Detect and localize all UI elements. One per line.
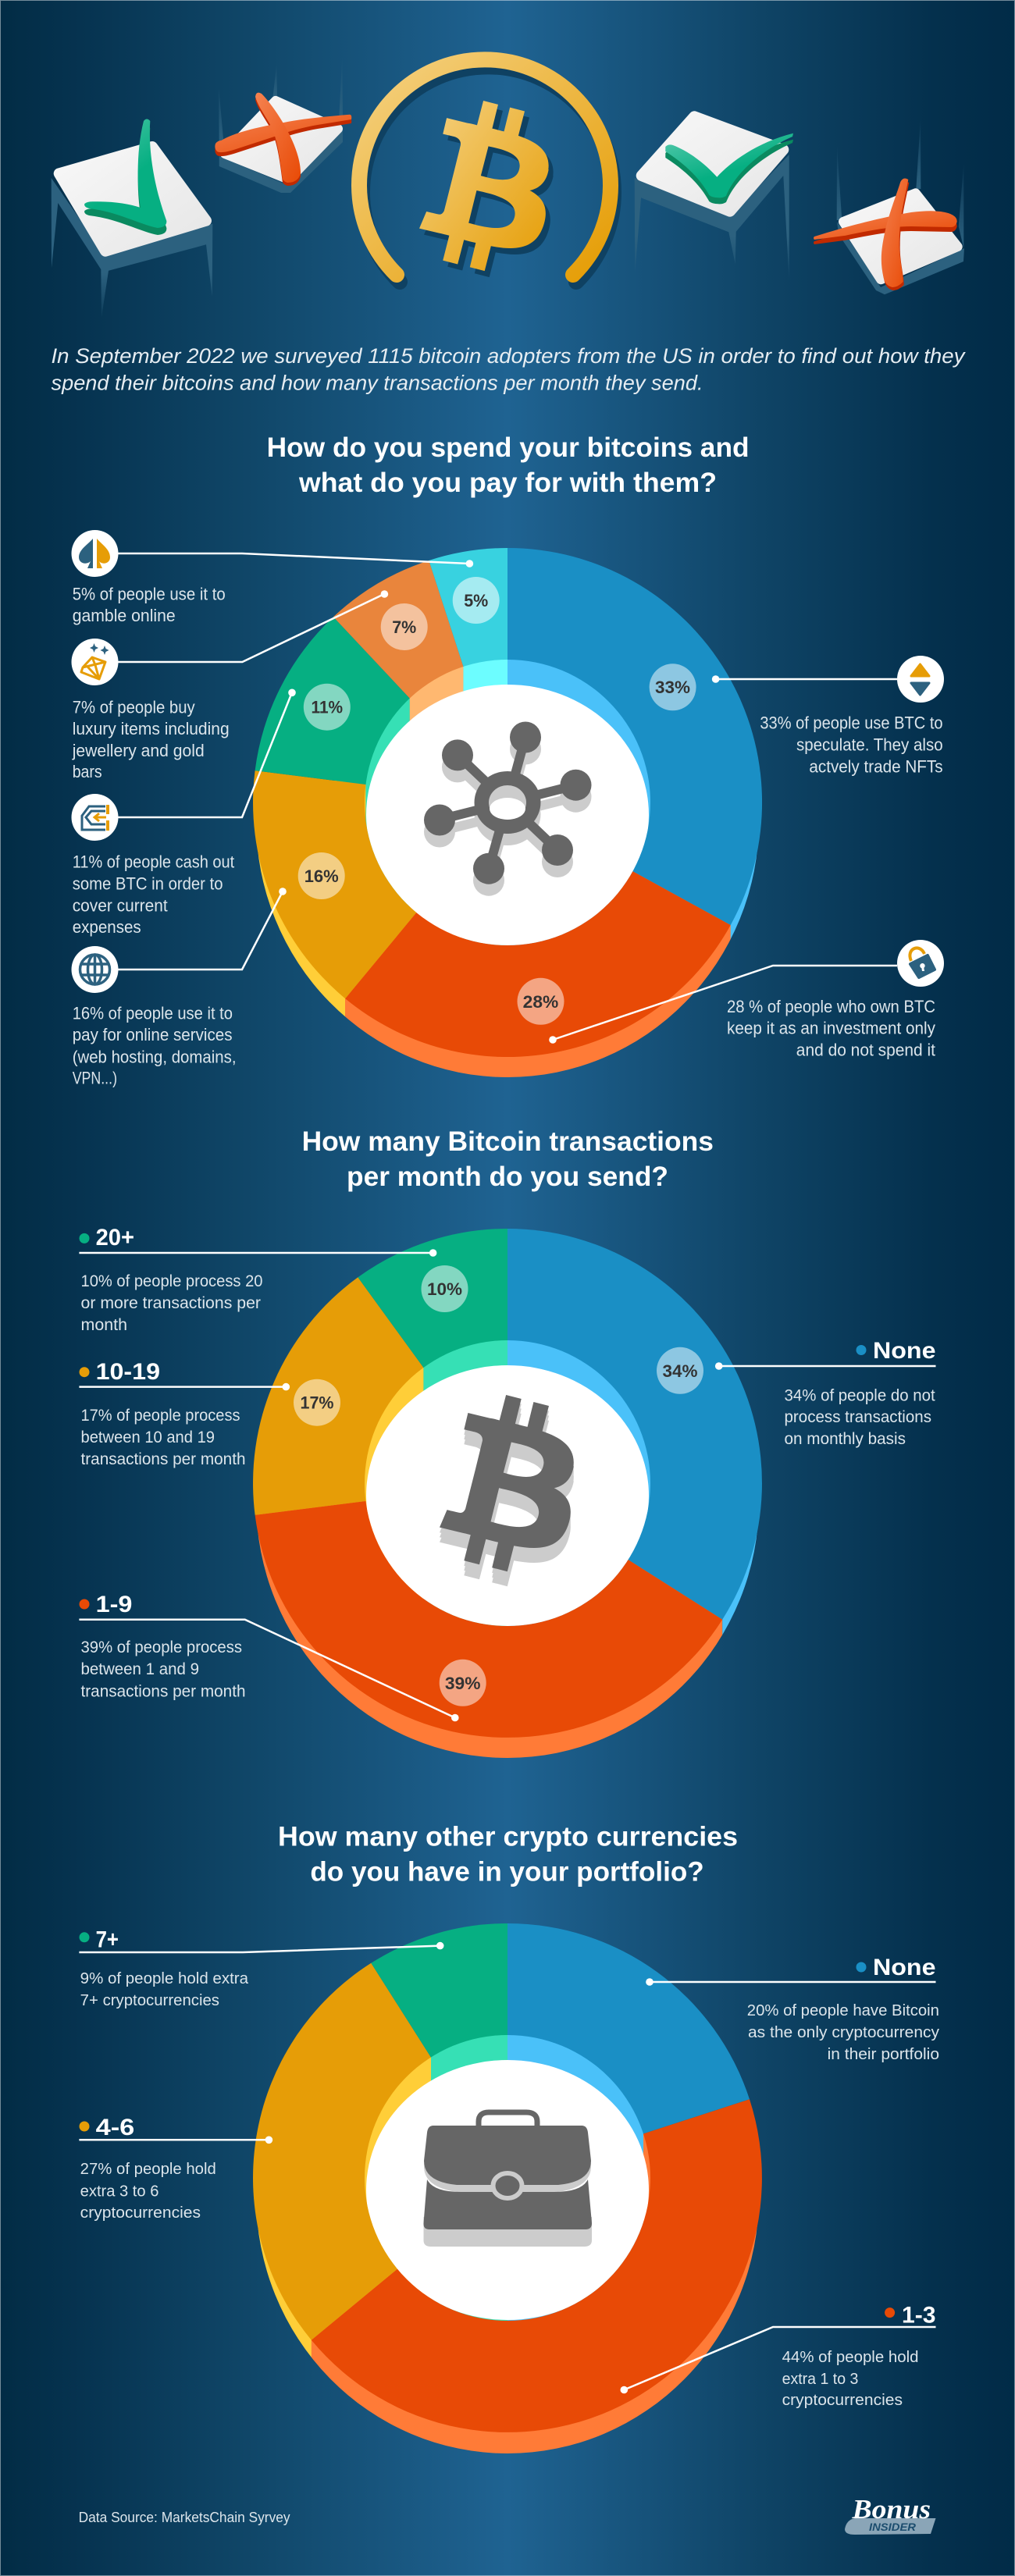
icon: up down arrows [897,656,944,703]
legend: 1-3: extra 1 to 3 [782,2371,858,2388]
text: gamble: gamble online [73,606,176,625]
percent bubbles [298,577,696,1025]
text: investment: and do not spend it [796,1040,935,1060]
logo: Bonus Insider [845,2494,935,2535]
legend: none (transactions): process transactions [784,1408,931,1426]
leader line dots [265,1942,654,2393]
data source: Data Source: MarketsChain Syrvey [79,2510,290,2525]
text: online services: VPN...) [73,1068,117,1087]
legend: 10-19 [79,1359,290,1468]
text: cash out: 11% of people cash out [73,852,234,872]
legend: 7+ [79,1927,440,2009]
legend: 1-3: 44% of people hold [782,2349,918,2366]
legend: 1-3: cryptocurrencies [782,2392,903,2409]
legend: 7+: 7+ cryptocurrencies [80,1992,219,2009]
icon: gambling spade [72,530,119,577]
text: investment: 28 % of people who own BTC [727,997,935,1016]
icon: padlock [897,940,944,987]
heading: portfolio: How many other crypto currencies [278,1821,738,1852]
heading: how do you spend: How do you spend your bitcoins and [267,432,750,463]
percent bubbles: 10% [427,1279,462,1299]
legend: 20+: 10% of people process 20 [81,1272,262,1290]
legend: 4-6: cryptocurrencies [80,2204,201,2222]
text: luxury: 7% of people buy [73,698,195,717]
heading: portfolio [278,1821,738,1888]
legend: none (transactions) [715,1338,935,1448]
text: gamble: 5% of people use it to [73,584,226,603]
heading: transactions: per month do you send? [347,1162,668,1192]
text: luxury [72,698,230,781]
logo: Bonus Insider: INSIDER [869,2521,917,2533]
text: speculate: 33% of people use BTC to [760,713,943,733]
percent bubbles: 7% [392,617,416,637]
legend: 4-6: 27% of people hold [80,2161,216,2178]
icon: network [424,721,592,896]
legend: 1-3: 1-3 [902,2302,935,2328]
checkbox with green tick, left [52,119,212,318]
percent bubbles: 33% [655,678,690,697]
icon: briefcase [423,2112,592,2247]
checkbox with red cross, upper left [215,57,351,193]
legend: 20+: 20+ [96,1225,134,1251]
legend: 1-9 [79,1592,459,1721]
text: cash out [73,852,234,937]
legend: 10-19: between 10 and 19 [81,1429,215,1446]
percent bubbles: 17% [300,1393,334,1413]
legend: 1-9: 39% of people process [81,1638,242,1656]
text: luxury: luxury items including [73,719,230,738]
percent bubbles: 5% [464,591,488,610]
legend: 7+: 7+ [96,1927,119,1953]
icon: globe [72,946,119,993]
text: luxury: jewellery and gold [72,741,205,760]
text: gamble [73,584,226,625]
legend: 10-19: 10-19 [96,1359,160,1385]
legend: 4-6: extra 3 to 6 [80,2183,158,2200]
percent bubbles: 11% [311,698,343,717]
checkbox with green tick, right [635,116,793,281]
icon: cash out [72,794,119,841]
text: cash out: cover current [73,895,168,915]
text: online services [73,1004,236,1087]
legend: 1-9: between 1 and 9 [81,1660,199,1678]
percent bubbles: 16% [304,866,339,886]
intro text: spend their bitcoins and how many transactions per month they send. [52,372,703,395]
donut chart: portfolio [250,1923,772,2467]
checkbox with red cross, right [814,119,964,294]
text: investment: keep it as an investment only [727,1019,935,1038]
legend: none (portfolio): None [873,1955,935,1980]
legend: 20+ [79,1225,436,1334]
heading: how do you spend: what do you pay for with them? [298,468,717,498]
legend: none (transactions): 34% of people do not [784,1386,935,1405]
text: cash out: some BTC in order to [73,874,223,893]
legend: 4-6 [79,2115,269,2222]
percent bubbles: 34% [662,1361,698,1381]
percent bubbles: 28% [523,992,558,1012]
donut chart: spending [118,548,897,1093]
text: speculate: actvely trade NFTs [809,756,943,776]
intro text: In September 2022 we surveyed 1115 bitcoin adopters from the US in order to find out how they [52,344,966,368]
logo: Bonus Insider: Bonus [851,2494,931,2524]
legend: 1-9: 1-9 [96,1592,132,1617]
icon: grey bitcoin [440,1395,574,1586]
text: speculate [760,713,943,776]
text: speculate: speculate. They also [796,735,943,754]
legend: 7+: 9% of people hold extra [80,1970,249,1987]
heading: how do you spend [267,432,750,498]
legend: none (portfolio): 20% of people have Bitcoin [747,2002,939,2019]
text: online services: pay for online services [73,1025,233,1044]
legend: 10-19: 17% of people process [81,1407,240,1425]
bitcoin emblem with arc [359,59,614,282]
percent bubbles: 39% [445,1674,481,1693]
icon: diamond [72,639,119,685]
intro text [52,344,966,395]
legend: 20+: or more transactions per [81,1294,261,1312]
heading: transactions [302,1126,714,1192]
text: cash out: expenses [73,917,141,937]
legend: 20+: month [81,1316,127,1334]
donut chart: transactions [250,1229,769,1772]
leader lines [118,553,897,1044]
heading: transactions: How many Bitcoin transactions [302,1126,714,1157]
legend: 1-3 [624,2302,935,2409]
legend: 1-9: transactions per month [81,1682,245,1700]
text: investment [727,997,935,1060]
legend: 4-6: 4-6 [96,2115,134,2140]
text: online services: 16% of people use it to [73,1004,233,1023]
legend: 10-19: transactions per month [81,1450,245,1468]
legend: none (portfolio) [650,1955,939,2063]
legend: none (transactions): on monthly basis [784,1430,906,1448]
text: online services: (web hosting, domains, [73,1047,236,1066]
legend: none (portfolio): in their portfolio [828,2046,939,2063]
legend: none (portfolio): as the only cryptocurrency [748,2024,939,2041]
header illustration [52,57,964,318]
legend: none (transactions): None [873,1338,935,1364]
text: luxury: bars [73,762,102,781]
percent bubbles [294,1265,703,1706]
heading: portfolio: do you have in your portfolio? [310,1857,704,1888]
